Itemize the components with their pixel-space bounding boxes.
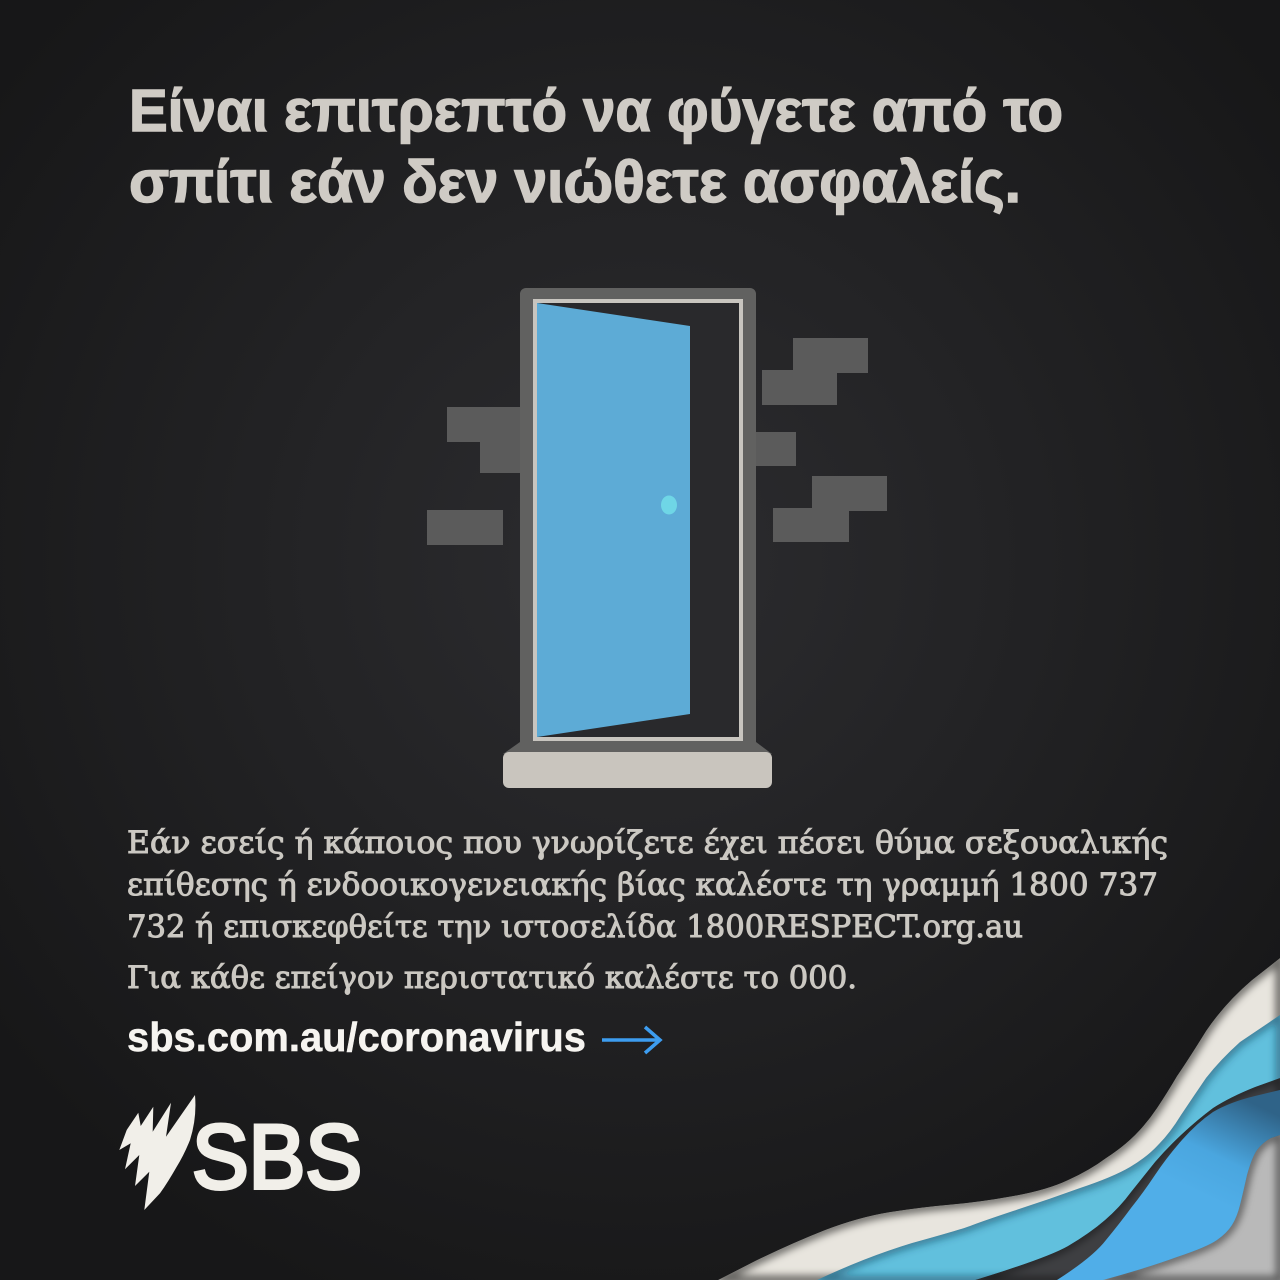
- wave: blue: [1057, 1090, 1280, 1280]
- illustration: open door in brick wall: [427, 288, 887, 788]
- logo wordmark: SBS: [192, 1107, 362, 1208]
- title: [129, 78, 1063, 215]
- body text: επίθεσης ή ενδοοικογενειακής βίας καλέστε τη γραμμή 1800 737: [127, 867, 1158, 903]
- title: σπίτι εάν δεν νιώθετε ασφαλείς.: [129, 149, 1021, 215]
- title: Είναι επιτρεπτό να φύγετε από το: [129, 78, 1063, 144]
- website link: sbs.com.au/coronavirus: [127, 1014, 586, 1060]
- arrow: [602, 1027, 660, 1053]
- wave: grey: [1103, 1135, 1280, 1280]
- SBS logo: [119, 1095, 362, 1210]
- wave: cream: [718, 958, 1280, 1280]
- open door leaf: [537, 303, 690, 737]
- door knob: [661, 496, 677, 514]
- door opening: [535, 301, 741, 739]
- body text: 732 ή επισκεφθείτε την ιστοσελίδα 1800RESPECT.org.au: [127, 909, 1023, 945]
- wave: dark grey: [975, 1078, 1280, 1280]
- icon: SBS mercator mark: [119, 1095, 195, 1210]
- wave: light blue: [817, 1015, 1280, 1280]
- body text: Για κάθε επείγον περιστατικό καλέστε το 000.: [127, 960, 857, 996]
- body text: [127, 825, 1168, 996]
- bricks: [427, 338, 887, 545]
- door step: [503, 752, 772, 788]
- decorative paper waves: [718, 958, 1280, 1280]
- door frame: [503, 288, 772, 754]
- body text: Εάν εσείς ή κάποιος που γνωρίζετε έχει πέσει θύμα σεξουαλικής: [127, 825, 1168, 861]
